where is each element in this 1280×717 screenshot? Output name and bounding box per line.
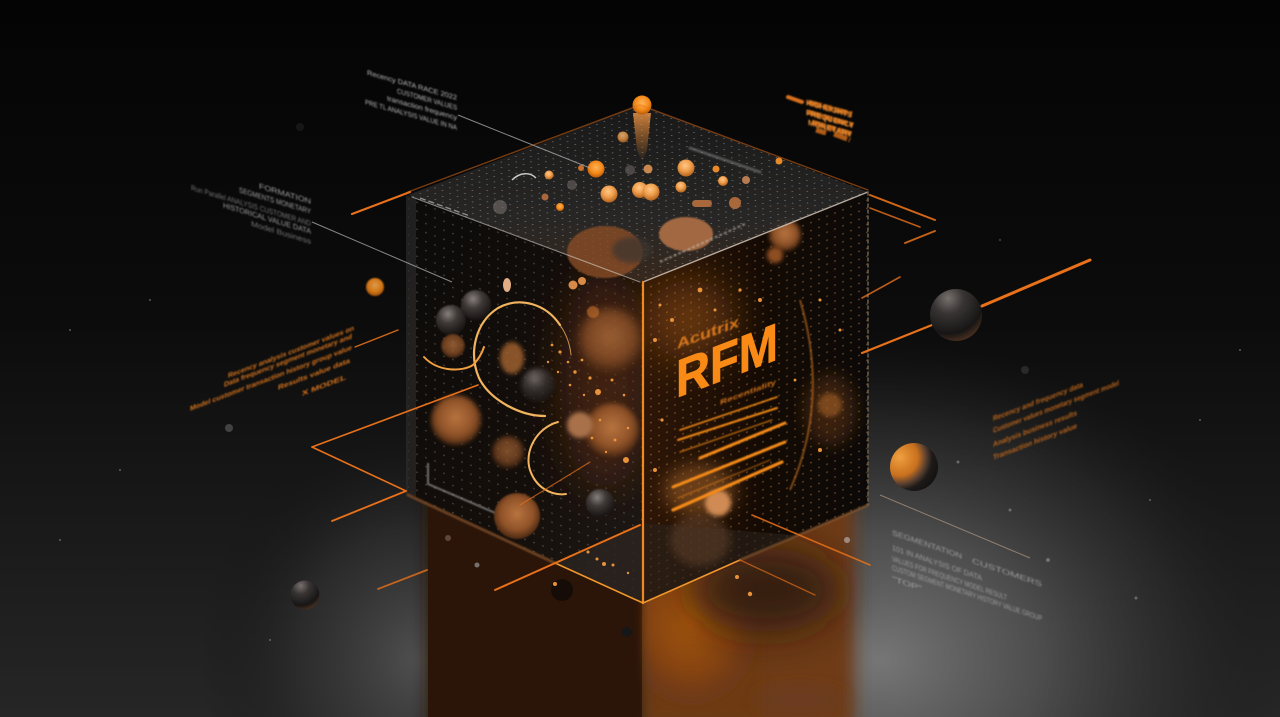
inner spheres and blobs xyxy=(431,219,842,539)
text block: bottom right grey: 101 IN ANALYSIS OF DATA xyxy=(892,543,983,583)
cube top face xyxy=(408,105,868,282)
text block: right orange: Customer values monetary segment model xyxy=(993,378,1119,435)
text block: right orange: Transaction history value xyxy=(993,421,1078,462)
heading: RFM: RFM xyxy=(676,311,778,410)
floating sphere: dark xyxy=(930,289,982,341)
text block: top left grey xyxy=(365,69,457,132)
text block: left orange: Results value data xyxy=(278,355,351,392)
text block: left orange: Model customer transaction history group value xyxy=(190,343,352,413)
text block: right orange: Recency and frequency data xyxy=(993,380,1084,423)
text block: top left grey: transaction frequency xyxy=(387,95,457,122)
floor specks xyxy=(59,123,1241,641)
text block: bottom right grey: CUSTOMERS xyxy=(972,556,1042,589)
golden rings xyxy=(424,302,571,494)
text block: left grey: Run Parallel ANALYSIS CUSTOMER AND xyxy=(191,183,311,228)
text block: top left grey: CUSTOMER VALUES xyxy=(397,87,457,112)
orange speckles xyxy=(547,288,842,574)
cube edges xyxy=(408,105,868,603)
text block: left orange: Recency analysis customer values on xyxy=(228,323,354,380)
text block: left orange: X MODEL xyxy=(302,372,347,398)
grey leader lines xyxy=(312,115,1030,558)
orange guide lines xyxy=(312,192,1090,595)
floating sphere: small orange xyxy=(366,278,384,296)
panel bars xyxy=(673,397,785,510)
floating sphere: small dark xyxy=(290,580,320,610)
label: Acutrix: Acutrix xyxy=(677,314,739,353)
cube right face xyxy=(643,192,868,603)
text block: left grey: FORMATION xyxy=(259,182,311,206)
text block: left grey: HISTORICAL VALUE DATA xyxy=(223,201,312,236)
text block: left grey: Model Business xyxy=(251,219,311,246)
label: subtitle: Recentiality xyxy=(720,378,776,407)
text block: bottom right grey: "TOP" xyxy=(892,574,922,593)
label: orange bars text: MONETARY xyxy=(808,118,853,139)
text block: right orange: Analysis business results xyxy=(993,408,1077,449)
top sphere cluster xyxy=(493,96,782,214)
text block: top left grey: Recency DATA RACE 2022 xyxy=(367,69,457,102)
label: orange bars text: FREQUENCY xyxy=(806,108,855,131)
text block: bottom right grey xyxy=(892,528,1042,623)
floating sphere: orange and dark xyxy=(890,443,938,491)
cube left face xyxy=(406,195,650,603)
text block: left grey: SEGMENTS MONETARY xyxy=(239,186,311,216)
cube reflection on floor xyxy=(428,490,854,717)
text block: bottom right grey: SEGMENTATION xyxy=(892,528,962,561)
text block: top left grey: PRE TL ANALYSIS VALUE IN NA xyxy=(365,98,457,132)
text block: right orange xyxy=(993,378,1119,462)
text block: bottom right grey: CUSTOM SEGMENT MONETARY HISTORY VALUE GROUP xyxy=(892,563,1042,623)
label: orange bars text xyxy=(806,98,855,139)
cube xyxy=(406,96,868,603)
face label xyxy=(673,311,785,510)
text block: top right orange xyxy=(788,97,855,140)
label: orange bars text: HIGHLIGHTS xyxy=(806,98,853,120)
text block: left orange: Data frequency segment monetary and xyxy=(224,332,352,389)
text block: bottom right grey: VALUES FOR FREQUENCY MODEL RESULT xyxy=(892,554,1007,602)
